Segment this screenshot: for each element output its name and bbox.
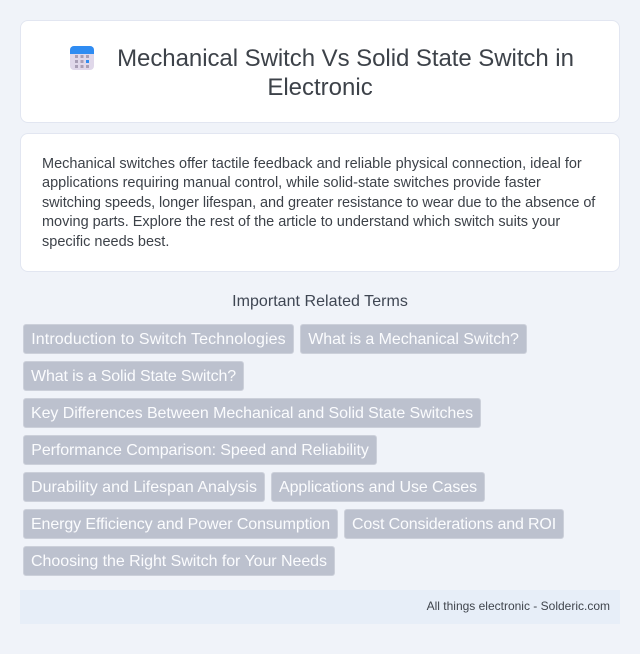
tag <box>23 472 265 502</box>
tag: What is a Solid State Switch? <box>31 368 236 385</box>
tag <box>23 361 244 391</box>
tag <box>23 435 377 465</box>
footer text: All things electronic - Solderic.com <box>427 599 610 613</box>
tag <box>23 546 335 576</box>
tag <box>271 472 485 502</box>
footer <box>20 590 620 624</box>
intro paragraph: Mechanical switches offer tactile feedback and reliable physical connection, ideal for <box>42 156 582 172</box>
title: Mechanical Switch Vs Solid State Switch in <box>117 45 574 72</box>
heading: related terms: Important Related Terms <box>232 293 408 310</box>
tag <box>344 509 564 539</box>
intro paragraph <box>42 156 596 250</box>
tag: Durability and Lifespan Analysis <box>31 479 257 496</box>
tag <box>300 324 527 354</box>
tag: Energy Efficiency and Power Consumption <box>31 516 330 533</box>
tag list <box>23 324 564 576</box>
icon: calendar grid <box>70 46 94 70</box>
title <box>117 45 574 101</box>
title: Electronic <box>267 74 373 101</box>
intro paragraph: specific needs best. <box>42 234 169 250</box>
tag: Performance Comparison: Speed and Reliability <box>31 442 369 459</box>
tag: Key Differences Between Mechanical and Solid State Switches <box>31 405 473 422</box>
tag: Introduction to Switch Technologies <box>31 331 286 348</box>
intro paragraph: switching speeds, longer lifespan, and greater resistance to wear due to the absence of <box>42 195 595 211</box>
panel: title header <box>20 20 620 123</box>
tag: What is a Mechanical Switch? <box>308 331 519 348</box>
tag: Applications and Use Cases <box>279 479 477 496</box>
intro paragraph: applications requiring manual control, while solid-state switches provide faster <box>42 175 541 191</box>
tag: Cost Considerations and ROI <box>352 516 556 533</box>
panel: intro text <box>20 133 620 272</box>
tag <box>23 398 481 428</box>
tag <box>23 324 294 354</box>
tag <box>23 509 338 539</box>
tag: Choosing the Right Switch for Your Needs <box>31 553 327 570</box>
intro paragraph: moving parts. Explore the rest of the article to understand which switch suits your <box>42 214 560 230</box>
